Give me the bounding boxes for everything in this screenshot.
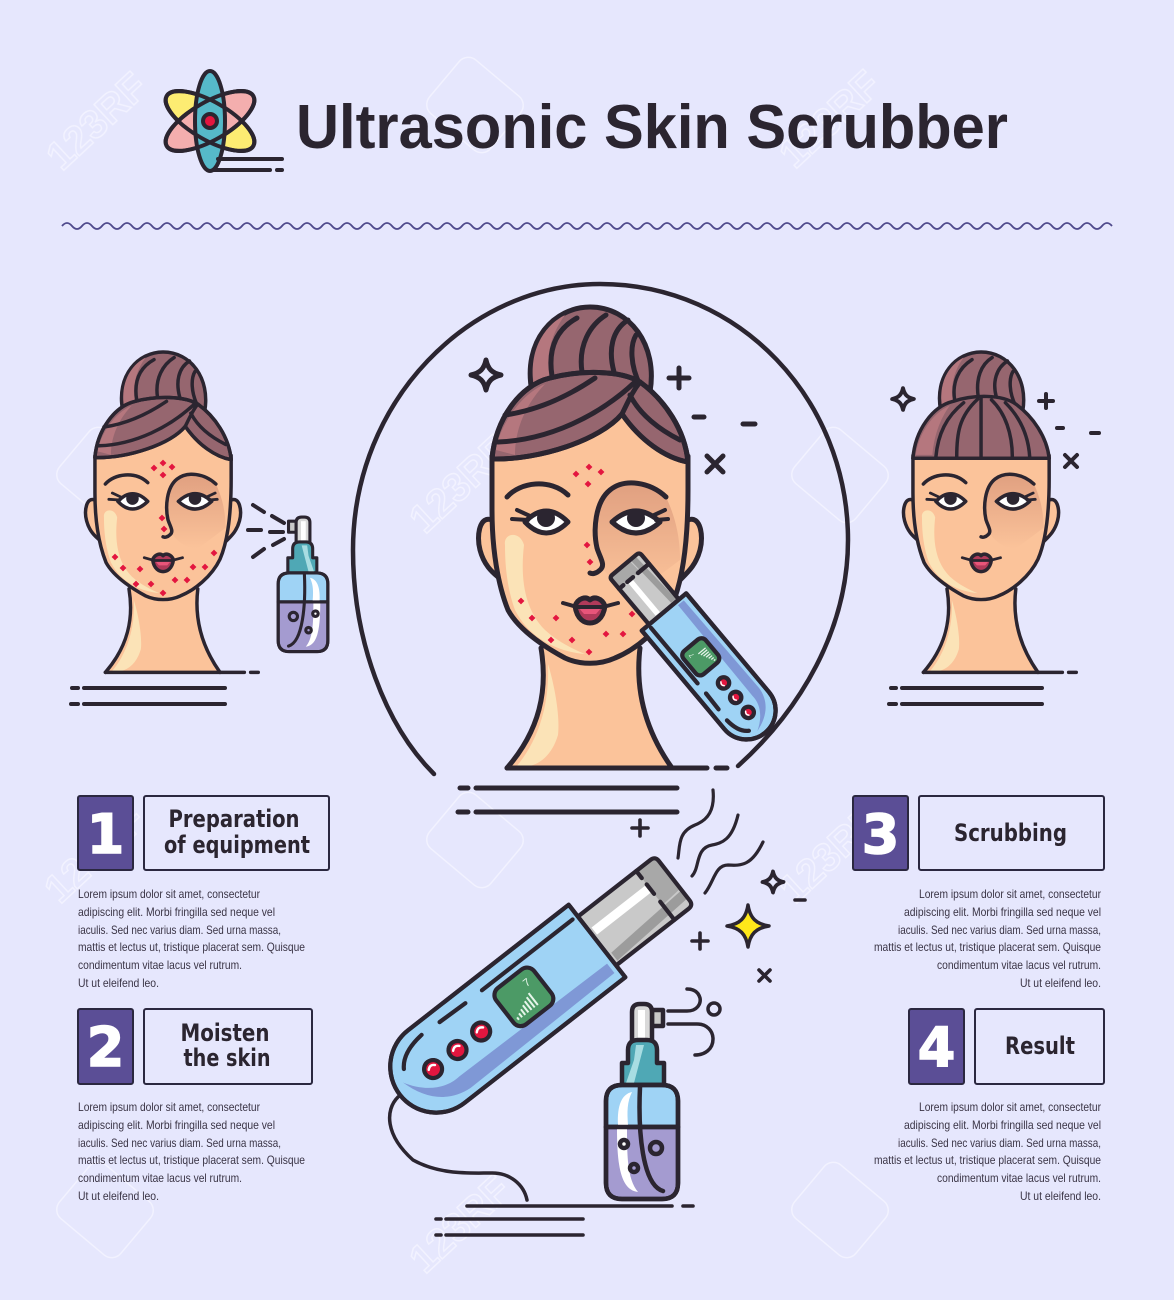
body text 2: Lorem ipsum dolor sit amet, consectetur bbox=[78, 1100, 260, 1114]
heading: moisten the skin: Moisten bbox=[180, 1019, 270, 1047]
body text 3: Lorem ipsum dolor sit amet, consectetur bbox=[919, 887, 1101, 901]
illustration: right face after treatment bbox=[889, 352, 1099, 704]
body text 4: iaculis. Sed nec varius diam. Sed urna massa, bbox=[898, 1136, 1101, 1150]
body text 4: Lorem ipsum dolor sit amet, consectetur bbox=[919, 1100, 1101, 1114]
heading: preparation of equipment: Preparation bbox=[168, 805, 300, 833]
ultrasonic waves bbox=[678, 790, 763, 893]
number badge 3 bbox=[853, 796, 908, 870]
watermark: 123RF bbox=[771, 63, 889, 177]
heading: result bbox=[975, 1009, 1104, 1084]
spray bottle large bbox=[606, 1004, 678, 1199]
heading: result: Result bbox=[1005, 1032, 1075, 1060]
step 3 bbox=[853, 796, 1104, 990]
watermark: 123RF bbox=[36, 798, 154, 912]
body text 1: mattis et lectus ut, tristique placerat sem. Quisque bbox=[78, 940, 305, 954]
watermark: 123RF bbox=[38, 65, 156, 179]
body text 3: iaculis. Sed nec varius diam. Sed urna massa, bbox=[898, 923, 1101, 937]
face bbox=[478, 307, 727, 768]
watermark bbox=[36, 52, 893, 1282]
acne dots bbox=[112, 460, 217, 596]
body text 2 bbox=[78, 1100, 305, 1203]
circle frame bbox=[353, 284, 848, 774]
face before treatment bbox=[86, 352, 258, 672]
base lines bbox=[889, 688, 1042, 704]
sparkles bbox=[632, 820, 805, 981]
heading: scrubbing: Scrubbing bbox=[954, 819, 1067, 847]
body text 2: Ut ut eleifend leo. bbox=[78, 1189, 159, 1203]
large scrubber device bbox=[372, 844, 703, 1131]
body text 4: mattis et lectus ut, tristique placerat sem. Quisque bbox=[874, 1153, 1101, 1167]
watermark: 123RF bbox=[771, 798, 889, 912]
body text 4 bbox=[874, 1100, 1101, 1203]
heading: scrubbing bbox=[919, 796, 1104, 870]
body text 1: condimentum vitae lacus vel rutrum. bbox=[78, 958, 242, 972]
body text 1: iaculis. Sed nec varius diam. Sed urna massa, bbox=[78, 923, 281, 937]
base lines bbox=[436, 1206, 693, 1235]
base lines bbox=[71, 688, 225, 704]
heading: moisten the skin: the skin bbox=[184, 1044, 270, 1072]
body text 4: Ut ut eleifend leo. bbox=[1020, 1189, 1101, 1203]
body text 1 bbox=[78, 887, 305, 990]
step 1 bbox=[78, 796, 329, 990]
sparkles bbox=[471, 360, 755, 472]
step 4 bbox=[874, 1009, 1104, 1203]
number badge 2 bbox=[78, 1009, 133, 1084]
body text 3: Ut ut eleifend leo. bbox=[1020, 976, 1101, 990]
body text 3 bbox=[874, 887, 1101, 990]
body text 4: adipiscing elit. Morbi fringilla sed neque vel bbox=[904, 1118, 1101, 1132]
watermark: 123RF bbox=[401, 1168, 519, 1282]
spray mist bbox=[248, 505, 284, 557]
body text 1: Ut ut eleifend leo. bbox=[78, 976, 159, 990]
sparkles bbox=[892, 388, 1099, 467]
body text 2: mattis et lectus ut, tristique placerat sem. Quisque bbox=[78, 1153, 305, 1167]
small scrubber device bbox=[602, 546, 787, 751]
body text 1: Lorem ipsum dolor sit amet, consectetur bbox=[78, 887, 260, 901]
number badge 4: 4 bbox=[918, 1016, 955, 1079]
acne dots bbox=[518, 464, 635, 655]
heading: moisten the skin bbox=[144, 1009, 312, 1084]
body text 3: condimentum vitae lacus vel rutrum. bbox=[937, 958, 1101, 972]
spray puffs bbox=[668, 989, 720, 1055]
spray bottle small bbox=[278, 517, 328, 652]
body text 2: condimentum vitae lacus vel rutrum. bbox=[78, 1171, 242, 1185]
number badge 1 bbox=[78, 796, 133, 870]
body text 3: adipiscing elit. Morbi fringilla sed neque vel bbox=[904, 905, 1101, 919]
heading: preparation of equipment: of equipment bbox=[164, 831, 310, 859]
face result bbox=[904, 352, 1076, 672]
body text 1: adipiscing elit. Morbi fringilla sed neque vel bbox=[78, 905, 275, 919]
body text 2: adipiscing elit. Morbi fringilla sed neque vel bbox=[78, 1118, 275, 1132]
step 2 bbox=[78, 1009, 312, 1203]
icon: atom bbox=[157, 71, 282, 171]
body text 4: condimentum vitae lacus vel rutrum. bbox=[937, 1171, 1101, 1185]
base lines bbox=[458, 788, 677, 812]
illustration: central face in circle bbox=[353, 284, 848, 812]
watermark: 123RF bbox=[401, 428, 519, 542]
body text 3: mattis et lectus ut, tristique placerat sem. Quisque bbox=[874, 940, 1101, 954]
title: Ultrasonic Skin Scrubber bbox=[296, 93, 1008, 162]
number badge 3: 3 bbox=[862, 803, 899, 866]
heading: preparation of equipment bbox=[144, 796, 329, 870]
body text 2: iaculis. Sed nec varius diam. Sed urna massa, bbox=[78, 1136, 281, 1150]
number badge 2: 2 bbox=[87, 1016, 124, 1079]
illustration: left face with spray bottle bbox=[71, 352, 328, 704]
number badge 1: 1 bbox=[87, 803, 124, 866]
number badge 4 bbox=[909, 1009, 964, 1084]
illustration: large scrubber with spray bbox=[372, 790, 805, 1235]
power cord bbox=[390, 1097, 527, 1200]
